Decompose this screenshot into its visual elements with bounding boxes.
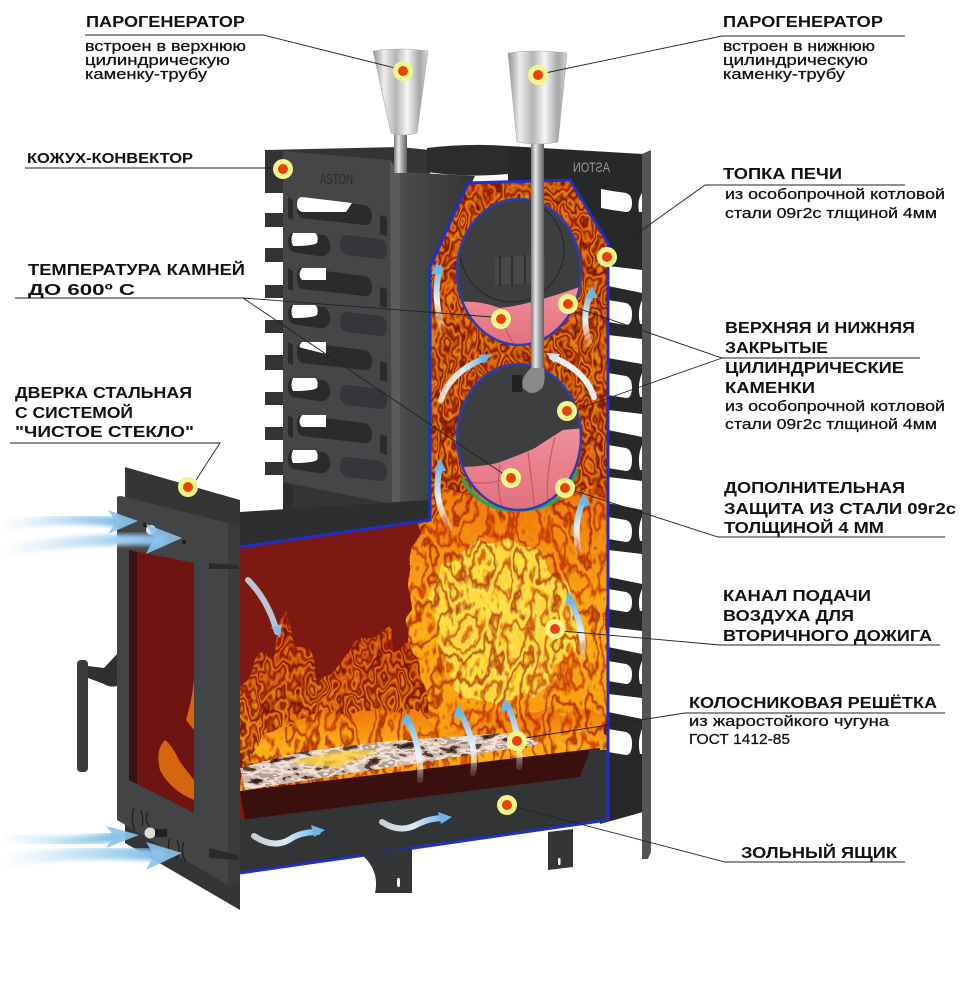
label: convector casing: КОЖУХ-КОНВЕКТОР: [27, 150, 193, 167]
marker: convector: [273, 159, 293, 179]
label: grate: из жаростойкого чугуна: [689, 714, 890, 730]
label: steel door: ДВЕРКА СТАЛЬНАЯ: [15, 385, 192, 402]
label: steam generator upper: каменку-трубу: [85, 67, 208, 83]
marker: upper chamber: [558, 294, 578, 314]
label: secondary air channel: [723, 588, 933, 645]
marker: firebox: [597, 247, 617, 267]
label: additional protection: [724, 480, 956, 537]
label: steel door: [15, 385, 194, 441]
label: steam generator lower: цилиндрическую: [723, 53, 868, 69]
label: closed cylindrical chambers: стали 09г2с тлщиной 4мм: [725, 417, 937, 433]
lower cylindrical stone chamber: [457, 364, 585, 515]
marker: lower stones: [501, 468, 521, 488]
label: closed cylindrical chambers: ЗАКРЫТЫЕ: [725, 340, 828, 357]
label: steam generator upper: встроен в верхнюю: [85, 39, 246, 55]
flames: [408, 490, 610, 790]
label: stone temperature: [28, 260, 245, 299]
label: secondary air channel: ВОЗДУХА ДЛЯ: [723, 608, 854, 625]
stove feet: [361, 829, 573, 893]
marker: top right funnel: [528, 65, 548, 85]
label: grate: ГОСТ 1412-85: [689, 732, 790, 748]
logo: left wall: ASTON: [320, 171, 353, 188]
label: firebox: ТОПКА ПЕЧИ: [723, 166, 842, 183]
blue outline of fire chamber: [240, 180, 608, 873]
upper cylindrical stone chamber: [457, 198, 585, 350]
panel: fire chamber: [235, 170, 620, 875]
door top vents: [143, 523, 186, 544]
door handle: [88, 654, 117, 687]
label: steel door: "ЧИСТОЕ СТЕКЛО": [15, 424, 194, 441]
steam generator: right funnel: [508, 51, 567, 393]
label: firebox: из особопрочной котловой: [725, 187, 945, 203]
air flow arrows: intake: [0, 510, 182, 870]
panel: left convector wall: [265, 147, 430, 510]
marker points: [178, 61, 617, 815]
label: closed cylindrical chambers: [725, 320, 945, 433]
label: additional protection: ЗАЩИТА ИЗ СТАЛИ 09г2с: [724, 501, 956, 518]
label: stone temperature: ТЕМПЕРАТУРА КАМНЕЙ: [28, 260, 245, 279]
label: secondary air channel: КАНАЛ ПОДАЧИ: [723, 588, 871, 605]
marker: ash box: [497, 795, 517, 815]
marker: upper stones: [491, 309, 511, 329]
marker: extra protection: [555, 478, 575, 498]
label: closed cylindrical chambers: КАМЕНКИ: [725, 380, 815, 397]
marker: air channel: [545, 619, 565, 639]
ash box: [240, 750, 612, 875]
air flow arrows: inside: [248, 262, 598, 844]
label: steam generator lower: встроен в нижнюю: [723, 39, 875, 55]
label: steam generator upper: цилиндрическую: [85, 53, 230, 69]
label: grate: [689, 694, 938, 748]
chimney: [427, 145, 508, 176]
marker: grate: [507, 731, 527, 751]
steam generator: left funnel: [373, 49, 428, 173]
label: steel door: С СИСТЕМОЙ: [15, 403, 133, 422]
panel: right convector wall: [508, 146, 651, 859]
door hinges: [209, 563, 238, 569]
logs: [240, 732, 540, 790]
label: steam generator upper: ПАРОГЕНЕРАТОР: [86, 14, 245, 31]
door bottom vents: [132, 808, 186, 862]
right rail: [642, 150, 651, 859]
marker: door: [178, 477, 198, 497]
label: firebox: стали 09г2с тлщиной 4мм: [725, 206, 937, 222]
door glass: [129, 550, 194, 813]
marker: top left funnel: [393, 61, 413, 81]
label: steam generator lower: каменку-трубу: [723, 67, 846, 83]
label: closed cylindrical chambers: из особопрочной котловой: [725, 399, 945, 415]
label: additional protection: ДОПОЛНИТЕЛЬНАЯ: [724, 480, 905, 497]
panel: door: [77, 467, 240, 910]
ember tray: [240, 748, 600, 820]
panel: stove body: [240, 145, 508, 547]
label: ash box: ЗОЛЬНЫЙ ЯЩИК: [741, 843, 897, 862]
label: firebox: [723, 166, 945, 222]
label: steam generator lower: [723, 14, 883, 83]
label: grate: КОЛОСНИКОВАЯ РЕШЁТКА: [689, 694, 938, 712]
label: additional protection: ТОЛЩИНОЙ 4 ММ: [724, 518, 884, 537]
logo: right wall: ASTON: [573, 159, 610, 175]
label: steam generator lower: ПАРОГЕНЕРАТОР: [723, 14, 883, 31]
marker: lower chamber: [557, 401, 577, 421]
label: secondary air channel: ВТОРИЧНОГО ДОЖИГА: [723, 628, 933, 645]
label: steam generator upper: [85, 14, 246, 83]
label: stone temperature: ДО 600º С: [28, 282, 136, 299]
label: closed cylindrical chambers: ВЕРХНЯЯ И НИЖНЯЯ: [725, 320, 915, 337]
label: closed cylindrical chambers: ЦИЛИНДРИЧЕСКИЕ: [725, 360, 904, 377]
